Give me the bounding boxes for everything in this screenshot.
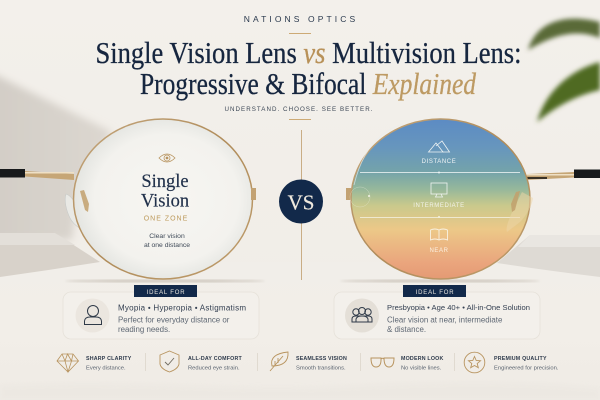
left hinge: [251, 188, 256, 200]
left stone block: [0, 233, 100, 277]
VS badge: VS: [288, 190, 314, 214]
badge: ideal for: [403, 285, 466, 297]
icon: group of people: [345, 298, 379, 332]
conditions list: Myopia • Hyperopia • Astigmatism: [118, 304, 246, 312]
lens description: at one distance: [144, 242, 190, 249]
icon: glasses: [371, 358, 394, 367]
icon: monitor: [431, 183, 447, 197]
conditions list: Presbyopia • Age 40+ • All-in-One Solution: [387, 303, 530, 312]
card description: reading needs.: [118, 325, 170, 334]
feature: premium quality: [464, 352, 559, 373]
card description: [387, 316, 503, 334]
one zone label: ONE ZONE: [144, 216, 188, 222]
table surface: [0, 262, 600, 400]
feature: sharp clarity: SHARP CLARITY: [86, 356, 132, 362]
table lens shadows: [65, 280, 540, 282]
icon: star badge: [464, 352, 485, 373]
title: Progressive & Bifocal Explained: [140, 67, 477, 101]
lens heading: Vision: [141, 192, 189, 212]
lens heading: Single: [141, 172, 189, 192]
right hinge: [346, 188, 351, 200]
feature: seamless vision: SEAMLESS VISION: [296, 356, 347, 362]
lens description: [144, 233, 190, 249]
icon: open book: [430, 229, 448, 240]
icon: mountains: [428, 141, 450, 152]
right ideal-for card: [334, 285, 540, 339]
icon: eye: [159, 154, 175, 162]
right glasses temple: [527, 170, 600, 180]
plant leaves: [528, 19, 600, 122]
feature: all-day comfort: ALL-DAY COMFORT: [188, 356, 242, 362]
badge: ideal for: IDEAL FOR: [147, 290, 185, 296]
feature: seamless vision: Smooth transitions.: [296, 366, 346, 372]
feature: all-day comfort: Reduced eye strain.: [188, 366, 240, 372]
feature: premium quality: Engineered for precision.: [494, 366, 559, 372]
feature: all-day comfort: [160, 351, 242, 372]
VS badge: [279, 180, 323, 224]
left glasses temple: [0, 169, 74, 180]
right stone block: [497, 235, 600, 277]
gold rule: [289, 33, 311, 34]
intermediate label: INTERMEDIATE: [413, 203, 465, 209]
left nose pad: [65, 194, 92, 232]
badge: ideal for: IDEAL FOR: [416, 290, 454, 296]
tagline: UNDERSTAND. CHOOSE. SEE BETTER.: [225, 106, 373, 113]
feature: modern look: No visible lines.: [401, 366, 442, 372]
feature: sharp clarity: Every distance.: [86, 366, 126, 372]
lens description: Clear vision: [149, 233, 185, 240]
feature: modern look: MODERN LOOK: [401, 356, 444, 362]
feature: premium quality: PREMIUM QUALITY: [494, 356, 547, 362]
zone line: [360, 216, 520, 218]
distance label: DISTANCE: [422, 159, 456, 165]
separators: [145, 353, 455, 371]
feature: sharp clarity: [57, 354, 132, 372]
near label: NEAR: [429, 248, 449, 254]
right nose pad: [507, 191, 533, 232]
badge: ideal for: [134, 285, 197, 297]
brand name: NATIONS OPTICS: [244, 14, 358, 24]
icon: leaf: [270, 352, 288, 371]
title: Single Vision Lens vs Multivision Lens:: [96, 36, 522, 70]
right lens: [350, 119, 530, 279]
feature: seamless vision: [270, 352, 347, 372]
icon: shield check: [160, 351, 179, 372]
zone line: [360, 172, 520, 174]
card description: & distance.: [387, 325, 426, 334]
gold rule: [289, 119, 311, 120]
card description: Clear vision at near, intermediate: [387, 316, 503, 324]
card description: Perfect for everyday distance or: [118, 316, 230, 324]
icon: diamond: [57, 354, 78, 372]
left bridge clip: [80, 190, 89, 212]
centre divider: [301, 130, 302, 280]
left ideal-for card: [63, 285, 259, 339]
title: [96, 36, 522, 101]
lens heading: [141, 172, 189, 212]
card description: [118, 316, 230, 334]
icon: person: [76, 298, 110, 332]
wall shadow: [0, 72, 112, 240]
left lens: [74, 119, 252, 279]
feature: modern look: [371, 356, 444, 372]
